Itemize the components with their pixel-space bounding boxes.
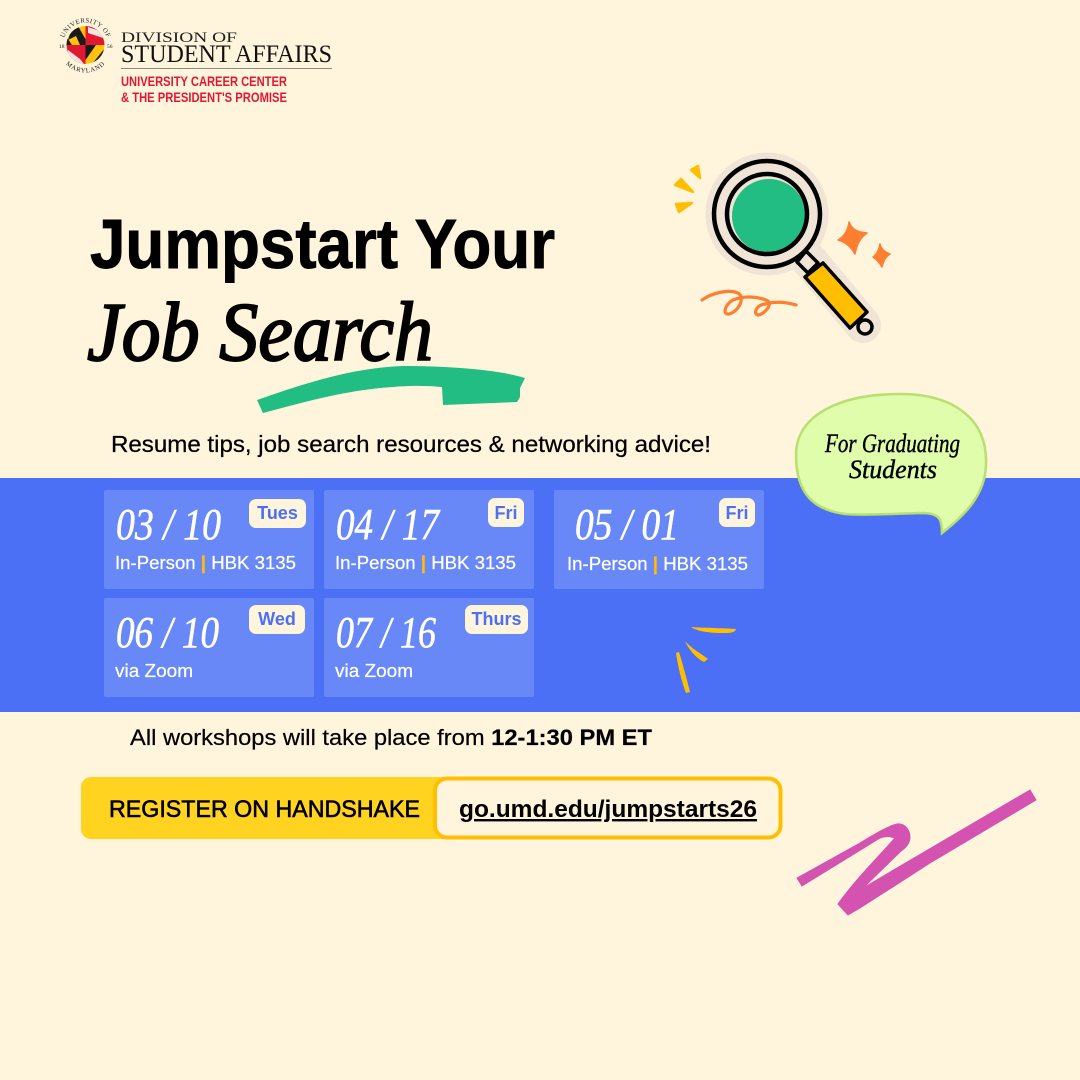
panel: date 05/01: 05 / 01 [575, 500, 679, 549]
panel: date 03/10 [104, 490, 314, 589]
speech bubble: For Graduating Students: For Graduating [824, 429, 960, 458]
day badge: Fri [719, 498, 755, 527]
panel: date 05/01: In-Person | HBK 3135 [567, 553, 748, 574]
logo seal: UNIVERSITY OF [60, 18, 110, 37]
title line 1: Jumpstart Your [90, 205, 555, 283]
registration link box: go.umd.edu/jumpstarts26 [459, 796, 757, 823]
logo seal: 18 [59, 44, 65, 50]
day badge: Tues: Tues [257, 503, 298, 523]
panel: date 05/01 [554, 490, 764, 589]
logo: Division of Student Affairs: & THE PRESIDENT'S PROMISE [121, 89, 287, 105]
day badge: Wed [249, 605, 305, 634]
panel: date 04/17: 04 / 17 [336, 500, 441, 549]
registration link box [435, 778, 780, 838]
panel: date 06/10: via Zoom [115, 660, 193, 681]
logo seal: 56 [107, 44, 113, 50]
logo seal: MARYLAND [66, 61, 104, 73]
panel: date 04/17 [324, 490, 534, 589]
registration button [81, 777, 780, 839]
logo wordmark: DIVISION OF [121, 30, 237, 46]
panel: date 06/10 [104, 598, 314, 697]
icon: orange squiggle [702, 291, 796, 315]
magnifier lens [714, 161, 820, 267]
green brush underline [257, 366, 525, 413]
day badge: Wed: Wed [258, 609, 296, 629]
panel: date 04/17: In-Person | HBK 3135 [335, 552, 516, 573]
blue band [0, 478, 1080, 712]
panel: date 03/10: In-Person | HBK 3135 [115, 552, 296, 573]
registration button: REGISTER ON HANDSHAKE [109, 796, 420, 823]
icon: magnifying glass [706, 153, 872, 334]
icon: yellow accent strokes [676, 627, 736, 693]
day badge: Thurs: Thurs [471, 609, 522, 629]
panel: date 06/10: 06 / 10 [116, 608, 219, 657]
logo seal [59, 18, 113, 73]
panel: date 03/10: 03 / 10 [116, 500, 221, 549]
magnifier handle [797, 251, 872, 334]
title line 2: script: Job Search [87, 286, 433, 379]
logo: Division of Student Affairs [59, 18, 332, 105]
panel: date 07/16 [324, 598, 534, 697]
workshop time note: All workshops will take place from 12-1:30 PM ET [130, 725, 653, 750]
panel: date 07/16: via Zoom [335, 660, 413, 681]
panel: date 07/16: 07 / 16 [336, 608, 436, 657]
logo: Division of Student Affairs: STUDENT AFFAIRS [121, 39, 332, 68]
day badge: Fri: Fri [725, 503, 749, 523]
subtitle: Resume tips, job search resources & networking advice! [111, 431, 711, 457]
day badge: Fri [488, 498, 524, 527]
pink brush scribble [797, 790, 1036, 915]
day badge: Tues [249, 499, 306, 528]
logo: Division of Student Affairs: UNIVERSITY CAREER CENTER [121, 73, 287, 89]
day badge: Fri: Fri [494, 503, 518, 523]
icon: orange stars [838, 222, 890, 267]
speech bubble: For Graduating Students [796, 394, 986, 533]
speech bubble: For Graduating Students: Students [849, 455, 937, 484]
magnifier halo [706, 153, 863, 325]
icon: yellow sparks [675, 166, 700, 212]
day badge: Thurs [465, 605, 528, 634]
